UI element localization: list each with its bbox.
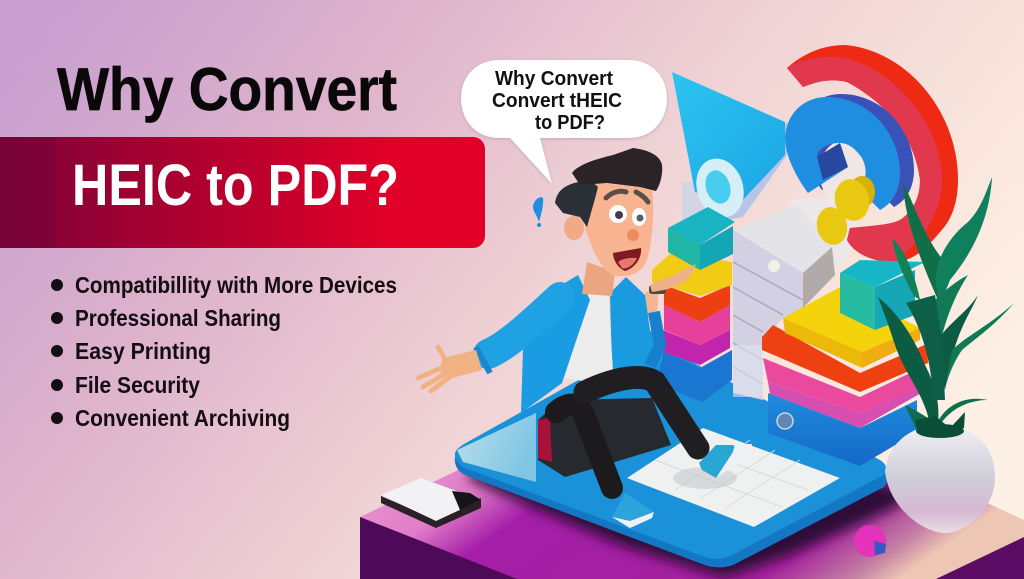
left colour stack (652, 207, 735, 402)
yellow layer (652, 252, 732, 296)
title: Why Convert: Why Convert (57, 56, 397, 123)
left leg (556, 405, 612, 488)
phone (381, 478, 481, 528)
character (418, 148, 752, 528)
right hand arm (649, 264, 696, 318)
pink layer (664, 305, 730, 345)
ring (689, 152, 751, 224)
left shoe (612, 493, 654, 528)
face (585, 182, 653, 276)
cyan triangle with ring (672, 72, 787, 224)
teal box (668, 207, 735, 270)
yellow layer (783, 287, 920, 368)
left open hand (418, 347, 482, 391)
white shirt (562, 285, 613, 382)
paper sheet (627, 428, 840, 527)
neck (582, 262, 615, 296)
bubble line 1: Why Convert (495, 68, 613, 90)
right colour stack (762, 260, 928, 466)
backdrop behind drawers (790, 195, 860, 275)
left jacket panel and sleeve (476, 275, 590, 413)
small ball (854, 525, 886, 557)
teal small box (840, 260, 925, 330)
side hair (555, 180, 598, 227)
top hair (572, 148, 662, 191)
bullet 1: Compatibillity with More Devices (75, 272, 397, 298)
right leg (585, 377, 698, 448)
bullet 2: Professional Sharing (75, 305, 281, 331)
bubble line 2: Convert tHEIC (492, 90, 622, 112)
bubble line 3: to PDF? (535, 112, 605, 134)
plant (878, 177, 1014, 437)
right jacket panel (610, 277, 664, 372)
blue box (660, 350, 732, 402)
blue platform with paper (455, 340, 887, 567)
yellow pills (813, 175, 875, 248)
red arc (787, 45, 958, 262)
bullet 4: File Security (75, 372, 200, 398)
magenta layer (663, 330, 730, 365)
right shoe (699, 444, 752, 478)
orange layer (664, 285, 730, 322)
ear (564, 216, 584, 240)
bullet 5: Convenient Archiving (75, 405, 290, 431)
seat box (538, 398, 671, 477)
blue arc (785, 94, 914, 210)
nose (627, 229, 639, 241)
speech bubble (461, 60, 667, 185)
magenta-pink layer (768, 382, 925, 428)
banner text: HEIC to PDF? (72, 153, 399, 218)
drawer knob (768, 260, 780, 272)
bullet list (51, 272, 397, 431)
bullet 3: Easy Printing (75, 338, 211, 364)
blue base (768, 393, 917, 466)
red title banner (0, 137, 485, 248)
pedestal (360, 440, 1024, 579)
eyebrows (606, 191, 648, 202)
orange layer (762, 325, 928, 392)
pink layer (763, 358, 922, 413)
flower pot (885, 424, 995, 533)
white drawers (733, 205, 835, 400)
eyes (609, 205, 646, 226)
blue exclamation mark (533, 197, 543, 227)
mouth (613, 248, 641, 271)
